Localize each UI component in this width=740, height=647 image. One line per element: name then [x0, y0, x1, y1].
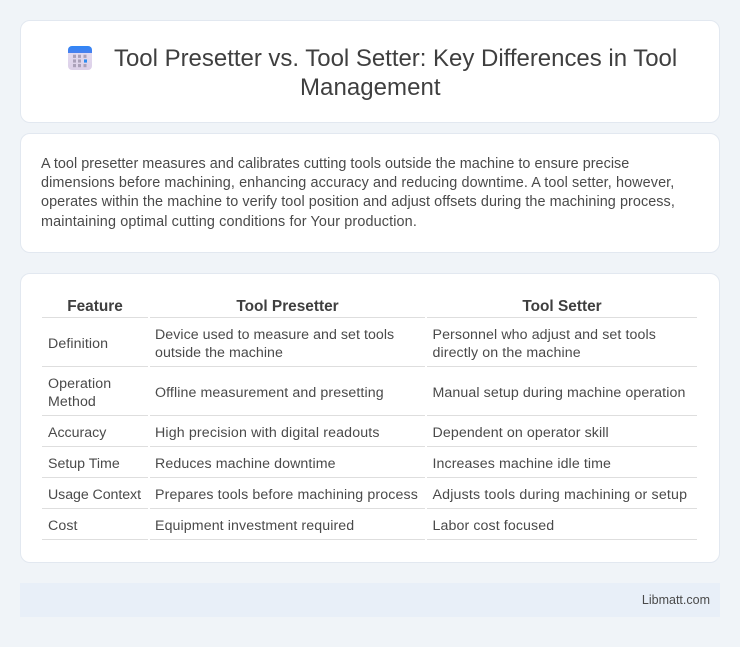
table: Prepares tools before machining process: [155, 487, 418, 503]
header: feature: Feature: [67, 298, 123, 315]
intro text: dimensions before machining, enhancing accuracy and reducing downtime. A tool setter, however,: [41, 175, 674, 191]
row: cost: Cost: [48, 518, 78, 534]
table: Adjusts tools during machining or setup: [432, 487, 687, 503]
intro text: A tool presetter measures and calibrates cutting tools outside the machine to ensure precise: [41, 156, 629, 172]
header: tool presetter: Tool Presetter: [236, 298, 339, 315]
row: setup time: Setup Time: [48, 456, 120, 472]
row: definition: Definition: [48, 336, 108, 352]
table: [42, 298, 697, 540]
row: operation method: Method: [48, 394, 96, 410]
table: High precision with digital readouts: [155, 425, 380, 441]
table: Dependent on operator skill: [432, 425, 609, 441]
row: usage context: Usage Context: [48, 487, 141, 503]
intro text: [41, 156, 675, 230]
intro text: maintaining optimal cutting conditions for Your production.: [41, 214, 417, 230]
row: operation method: [48, 376, 111, 410]
header: tool setter: Tool Setter: [522, 298, 602, 315]
table: outside the machine: [155, 345, 283, 361]
row: operation method: Operation: [48, 376, 111, 392]
title: [114, 45, 677, 101]
title: Management: [300, 74, 441, 101]
footer: [20, 583, 720, 617]
panel: comparison table: [20, 273, 720, 563]
footer credit: Libmatt.com: [642, 593, 710, 607]
icon: calendar: [68, 46, 92, 70]
title: Tool Presetter vs. Tool Setter: Key Differences in Tool: [114, 45, 677, 72]
table: Equipment investment required: [155, 518, 354, 534]
table: Offline measurement and presetting: [155, 385, 384, 401]
table: Device used to measure and set tools: [155, 327, 394, 343]
table: Increases machine idle time: [432, 456, 611, 472]
table: Personnel who adjust and set tools: [432, 327, 656, 343]
table: Reduces machine downtime: [155, 456, 336, 472]
table: Labor cost focused: [432, 518, 554, 534]
table: directly on the machine: [432, 345, 581, 361]
table: Manual setup during machine operation: [432, 385, 685, 401]
panel: intro: [20, 133, 720, 253]
intro text: operates within the machine to verify tool position and adjust offsets during the machining process,: [41, 194, 675, 210]
title card: [20, 20, 720, 123]
row: accuracy: Accuracy: [48, 425, 106, 441]
